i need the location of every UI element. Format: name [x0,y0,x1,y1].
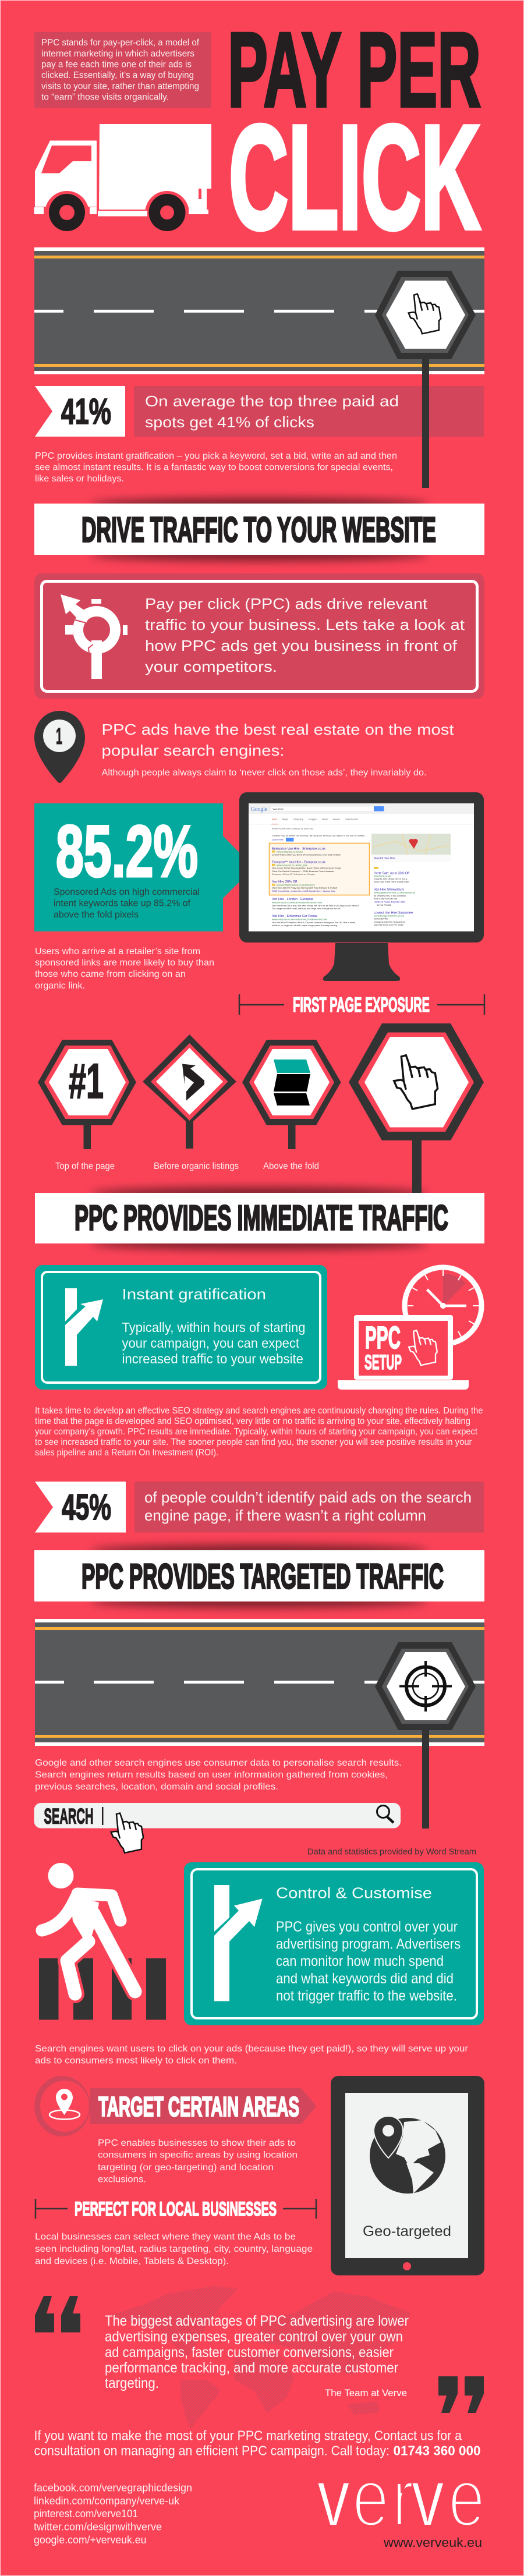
logo: verve: v [317,2452,350,2543]
monitor with search results [239,792,484,981]
search results screenshot: Lowest Van Hire Guarantee [374,912,413,915]
logo: verve: r [392,2452,414,2544]
intro panel: visits to your site, rather than attempting [41,82,199,91]
text: search engines want clicks: Search engines want users to click on your ads (because they get paid!), so they will serve up your [35,2044,468,2054]
callout: 85.2%: 85.2% [56,812,198,892]
logo: verve: e [448,2452,485,2544]
panel: instant gratification: Typically, within hours of starting [122,1320,305,1335]
panel: instant gratification: Instant gratification [122,1285,266,1303]
panel: control and customise: not trigger traffic to the website. [276,1987,457,2004]
panel: relevant traffic: traffic to your business. Lets take a look at [145,616,465,633]
icon: junction arrow [214,1885,263,2001]
heading: first page exposure [239,994,484,1016]
sign captions [55,1161,319,1171]
search results screenshot: www.enterprise.co.uk/content/van_rental/van-hire.html [272,919,327,921]
text: seo vs ppc paragraph [35,1406,483,1458]
search results screenshot: www.europcar.co.uk/EE/E/models/vender/uk-nana [272,901,323,903]
icon: laptop with ppc setup [338,1315,469,1390]
quote text: advertising expenses, greater control over your own [105,2329,403,2345]
heading: immediate traffic [35,1182,484,1250]
search results screenshot: Van Hire - Enterprise Car Rental [272,915,317,918]
search results screenshot: www.europcar.co.uk/Van_Hire [277,864,307,866]
search results screenshot: Van Hire 20% Off [272,880,298,884]
world map backdrop [111,2286,411,2429]
icon: location pin [49,2089,80,2119]
search results screenshot: All vehicles new, in top-condition. [374,895,406,897]
search results screenshot: Hanford Road, Bayston Hill [374,901,405,903]
quote text: performance tracking, and more accurate customer [105,2360,398,2376]
icon: number 1 pin: 1 [56,724,62,749]
text: users more likely to buy: sponsored links are more likely to buy than [35,958,214,968]
intro panel: clicked. Essentially, it’s a way of buying [41,70,194,80]
heading: targeted traffic [34,1544,484,1608]
icon: truck [34,124,211,235]
text: seo vs ppc paragraph: time that the page is developed and SEO optimised, very little or no traffic is arriving to your site, effectively halting [35,1416,470,1426]
text: instant gratification paragraph: PPC provides instant gratification – you pick a keyword, set a bid, write an ad and then [35,451,397,461]
social links: pinterest.com/verve101 [34,2507,138,2520]
stat: 41% [35,386,484,437]
search results screenshot: Images [309,817,317,821]
sign: above the fold [242,1040,341,1149]
stat: 45%: engine page, if there wasn’t a right column [144,1507,426,1524]
stat: 45%: 45% [62,1487,111,1528]
sign: top of the page: #1 [69,1054,104,1108]
search results screenshot: medium, or large van all with ample cargo space for easy loading. [272,924,338,927]
search results screenshot: “Best Car Rental Company” – 2014 Business Travel Awards [272,870,334,873]
text: seo vs ppc paragraph: your company’s growth. PPC results are immediate. Typically, within hours of starting your campaign, you can expect [35,1427,478,1437]
text: real estate: Although people always claim to ‘never click on those ads’, they invariably do. [101,768,426,778]
intro panel: pay a fee each time one of their ads is [41,59,192,70]
logo: verve: www.verveuk.eu [383,2535,482,2550]
text: personalised search: Google and other search engines use consumer data to personalise search results. [35,1758,402,1768]
heading: perfect for local businesses: PERFECT FOR LOCAL BUSINESSES [75,2198,277,2220]
search results screenshot: Shopping [293,817,303,821]
search results screenshot: Search tools [345,817,358,821]
quote text: The Team at Verve [325,2387,407,2398]
search results screenshot: Europcar UK has 217 followers on Google+ [272,873,316,876]
search results screenshot: Web [272,817,278,821]
stat: 41%: 41% [61,392,111,432]
sign: before organic listings [143,1034,236,1149]
icon: magnifier [377,1806,394,1823]
search results screenshot: Cookies help us deliver our services. By using our services, you agree to our use of cookies. [272,835,365,837]
heading: drive traffic [34,498,484,561]
search results screenshot: Van Hire from £18 a day. We offer cheap van hire for as little or as long as you need it. [272,905,359,907]
icon: junction arrow [65,1288,103,1366]
quote text: The biggest advantages of PPC advertising are lower [105,2313,409,2329]
intro panel [34,32,211,108]
text: search engines want clicks: ads to consumers most likely to click on them. [35,2056,237,2065]
panel: control and customise [184,1862,484,2025]
social links: twitter.com/designwithverve [34,2521,162,2532]
stat: 41%: spots get 41% of clicks [145,413,314,431]
intro panel: to “earn” those visits organically. [41,92,169,102]
panel: relevant traffic [34,573,484,699]
text: seo vs ppc paragraph: to see increased traffic to your site. The sooner people can find you, the sooner you will see positive results in your [35,1437,472,1447]
banner: target certain areas [34,2076,317,2136]
stat: 41%: On average the top three paid ad [145,392,399,410]
search results screenshot: Vans from £39.99 7 day rate No Deposit! Free Delivery & Collect [272,887,338,890]
search results screenshot: Book Now in the Hertz Global Sale! [374,881,409,883]
text: geo targeting: PPC enables businesses to show their ads to [98,2138,296,2148]
icon: click sign [375,271,476,488]
text: seo vs ppc paragraph: It takes time to develop an effective SEO strategy and search engines are continuously changing the rules. During the [35,1406,483,1416]
callout: 85.2% [34,803,254,931]
quote text: targeting. [105,2375,159,2391]
social links: linkedin.com/company/verve-uk [34,2494,180,2507]
icon: pedestrian crossing [39,1863,166,2020]
social links: facebook.com/vervegraphicdesign [34,2481,192,2494]
icon: globe with pin [370,2116,445,2194]
logo: verve: e [352,2452,389,2544]
search results screenshot: www.enterprise.co.uk/Van [277,851,303,853]
text: local businesses: Local businesses can select where they want the Ads to be [35,2232,296,2242]
text: data source: Data and statistics provided by Word Stream [307,1848,476,1857]
search results screenshot: www.hertz.co.uk/ [374,875,391,877]
search results screenshot: Hertz Sale: up to 33% Off [374,872,409,876]
icon: laptop with ppc setup: PPC [365,1320,401,1355]
text: real estate: popular search engines: [101,742,284,759]
search results screenshot: Book a Jolly Good Van now [374,898,397,900]
social links: google.com/+verveuk.eu [34,2534,147,2546]
sign captions: Before organic listings [154,1161,239,1171]
road with click sign [34,247,484,488]
search results screenshot [249,803,474,927]
text: real estate [101,721,454,778]
search results screenshot: More [333,817,341,821]
search bar: SEARCH [44,1805,93,1828]
panel: instant gratification: increased traffic to your website [122,1351,303,1366]
panel: control and customise: can monitor how much spend [276,1953,444,1969]
text: users more likely to buy: Users who arrive at a retailer’s site from [35,947,200,956]
stat: 45% [35,1482,484,1532]
text: users more likely to buy: those who came from clicking on an [35,969,186,979]
search results screenshot: Van Hire from Enterprise Rent-A-Car with locations throughout the UK. Hire a small, [272,922,356,924]
search bar [34,1803,401,1853]
call to action: If you want to make the most of your PPC marketing strategy, Contact us for a [34,2428,462,2443]
search results screenshot: Google [251,806,267,813]
search results screenshot: Van Hire [272,808,284,810]
search results screenshot: News [322,817,328,821]
text: users more likely to buy: organic link. [35,981,85,991]
text: personalised search: Search engines return results based on user information gathered from cookies, [35,1770,388,1780]
search results screenshot: www.budgetvanhire.co.uk [374,915,404,917]
tablet: geo-targeted: Geo-targeted [363,2223,451,2240]
search results screenshot: Map for Van Hire [374,857,396,859]
text: geo targeting: consumers in specific areas by using location [98,2150,298,2160]
text: geo targeting [98,2138,298,2184]
call to action: 01743 360 000 [394,2443,481,2458]
icon: laptop with ppc setup: SETUP [364,1351,402,1374]
quote: opening mark [35,2296,80,2332]
sign captions: Top of the page [55,1161,115,1171]
search results screenshot: Our range includes small, medium and large vans throughout the UK. [272,908,341,910]
text: instant gratification paragraph: like sales or holidays. [35,474,124,484]
road with target sign [35,1619,484,1829]
text: users more likely to buy [35,947,214,991]
intro panel: internet marketing in which advertisers [41,49,194,59]
search results screenshot: SWB Transit Hire - Luton Box - LWB Transit Hire - Sprinter Hire [272,890,335,892]
text: instant gratification paragraph [35,451,397,484]
panel: relevant traffic: your competitors. [145,658,277,675]
search results screenshot: Van Hire From £30 Per Week [374,924,403,926]
panel: control and customise: and what keywords did and did [276,1971,454,1987]
text: real estate: PPC ads have the best real estate on the most [101,721,454,738]
logo: verve [317,2452,485,2550]
text: local businesses [35,2232,313,2266]
sign: top of the page [38,1040,136,1149]
panel: relevant traffic: Pay per click (PPC) ads drive relevant [145,595,428,612]
search results screenshot: Van Hire Shrewsbury [374,888,404,892]
search results screenshot: www.jollygoodvanhire.co.uk/Shrewsbury [374,892,415,894]
search results screenshot: 01902 884400 [374,917,388,920]
search results screenshot: Europcar™ Van Hire - Europcar.co.uk [272,860,325,864]
search results screenshot: www.brilliantvanhire.co.uk/Van-Hire [277,884,315,886]
text: local businesses: and devices (i.e. Mobile, Tablets & Desktop). [35,2256,229,2266]
search results screenshot: Cheapest Van Hire Guaranteed [374,921,405,923]
panel: control and customise: PPC gives you control over your [276,1919,458,1935]
callout: 85.2%: above the fold pixels [54,910,139,920]
panel: instant gratification [35,1265,327,1390]
text: search engines want clicks [35,2044,468,2065]
sign captions: Above the fold [263,1161,319,1171]
search results screenshot: Maps [282,817,288,821]
logo: verve: v [412,2452,444,2543]
icon: target sign [375,1642,476,1829]
sign: big click [349,1023,484,1193]
text: personalised search [35,1758,402,1792]
text: personalised search: previous searches, location, domain and social profiles. [35,1782,278,1792]
banner: target certain areas: TARGET CERTAIN AREAS [98,2091,299,2122]
panel: instant gratification: your campaign, you can expect [122,1335,300,1351]
panel: relevant traffic: how PPC ads get you business in front of [145,637,458,654]
search results screenshot: Enterprise Van Hire - Enterprise.co.uk [272,848,325,851]
search results screenshot: Learn more [272,838,284,841]
search results screenshot: About 45,400,000 results (0.31 seconds) [272,827,314,830]
search results screenshot: New Lower Prices Now Available. Book Online with Europcar Today! [272,867,341,870]
text: local businesses: seen including long/lat, radius targeting, city, country, language [35,2244,313,2254]
social links [34,2481,192,2546]
icon: clock [405,1267,481,1344]
text: geo targeting: targeting (or geo-targeting) and location [98,2163,274,2173]
quote text [105,2313,409,2398]
callout: 85.2%: intent keywords take up 85.2% of [54,899,191,908]
search results screenshot: Van Hire - London - Europcar [272,898,313,901]
quote: closing mark [438,2376,484,2413]
text: geo targeting: exclusions. [98,2175,146,2184]
search results screenshot: Enjoy to 33% off car hire in 2014. [374,878,408,880]
stat: 45%: of people couldn’t identify paid ads on the search [144,1489,472,1506]
call to action [34,2428,481,2458]
text: instant gratification paragraph: see almost instant results. It is a fantastic way to boost conversions for special events, [35,462,393,473]
intro panel: PPC stands for pay-per-click, a model of [41,38,200,48]
quote text: ad campaigns, faster customer conversions, easier [105,2344,394,2361]
tablet: geo-targeted [331,2076,484,2275]
heading: perfect for local businesses [36,2198,316,2220]
text: seo vs ppc paragraph: sales pipeline and a Return On Investment (ROI). [35,1448,218,1458]
icon: roundabout [61,594,128,679]
icon: number 1 pin [34,711,85,783]
callout: 85.2%: Sponsored Ads on high commercial [54,887,200,897]
panel: control and customise: Control & Customise [276,1884,432,1901]
search results screenshot: Lowest Rates when you Book Direct Guaranteed. Over 128 models! [272,853,341,856]
panel: control and customise: advertising program. Advertisers [276,1936,461,1953]
call to action: consultation on managing an efficient PPC campaign. Call today: [34,2443,390,2458]
search results screenshot: 01743 779826 [377,904,391,906]
